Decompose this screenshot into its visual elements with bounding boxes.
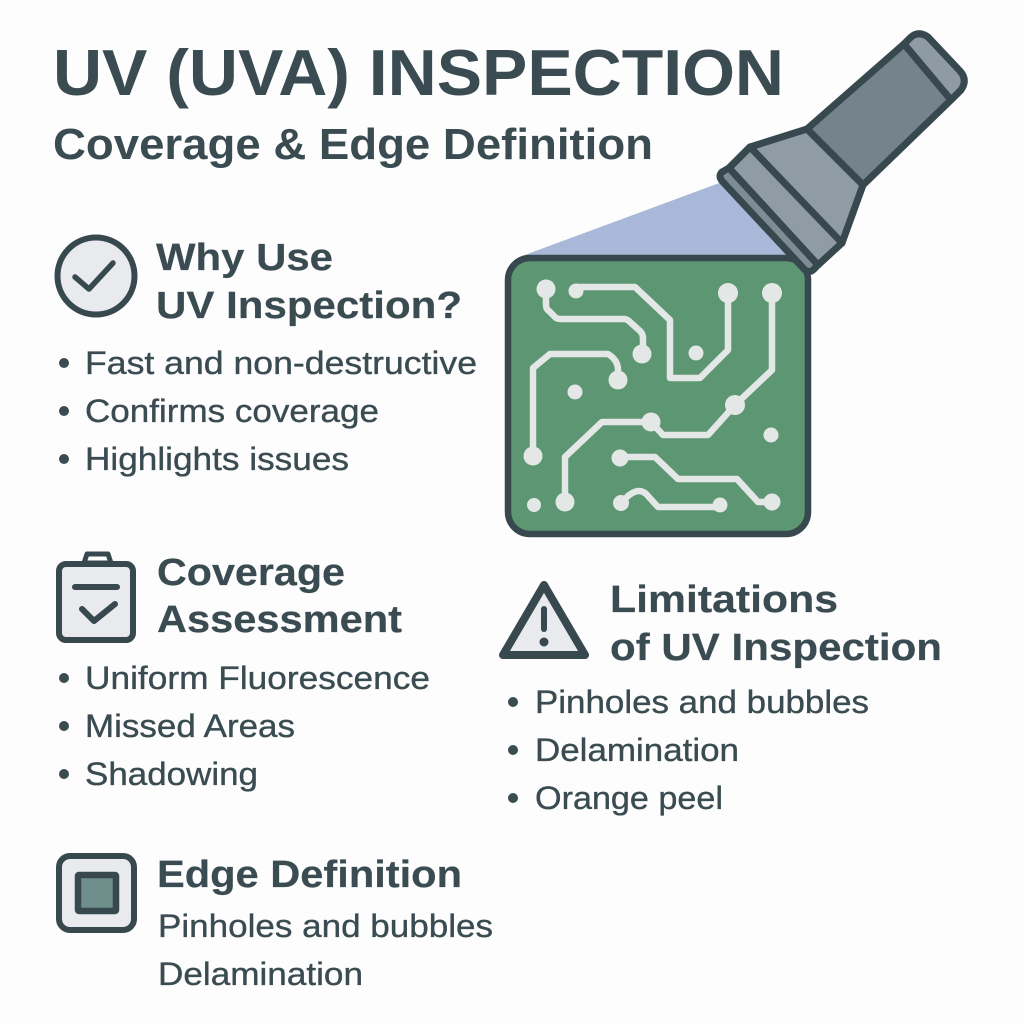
icon: clipboard [59,554,133,640]
heading: Assessment [157,599,402,641]
bullet list: Missed Areas [85,708,295,744]
circuit pads [524,280,782,512]
heading: Why Use [156,237,333,279]
icon: check circle [58,238,134,314]
heading: UV Inspection? [156,285,462,327]
heading: Coverage [157,552,345,594]
heading: of UV Inspection [610,627,942,669]
heading: Limitations [610,579,838,621]
illustration: UV flashlight [720,34,964,272]
section: coverage assessment [59,552,430,792]
bullet list: Pinholes and bubbles [535,684,869,720]
subtitle: Coverage & Edge Definition [53,120,653,169]
circuit traces [533,287,772,507]
icon: warning triangle [503,585,585,655]
text list [158,908,493,992]
section: edge definition [59,854,493,992]
title: UV (UVA) INSPECTION [53,36,784,109]
text list: Pinholes and bubbles [158,908,493,944]
light beam [522,182,790,256]
section: limitations [503,579,942,816]
bullet list: Highlights issues [85,441,349,477]
illustration: circuit board [508,258,808,534]
bullet list: Delamination [535,732,739,768]
bullet list: Uniform Fluorescence [85,660,430,696]
text list: Delamination [158,956,363,992]
bullet list [59,660,430,792]
bullet list: Orange peel [535,780,723,816]
bullet list: Fast and non-destructive [85,345,477,381]
section: why use UV inspection [58,237,477,477]
icon: nested square [59,856,134,930]
bullet list [508,684,869,816]
bullet list: Confirms coverage [85,393,379,429]
bullet list [59,345,477,477]
bullet list: Shadowing [85,756,258,792]
heading: Edge Definition [157,854,462,896]
